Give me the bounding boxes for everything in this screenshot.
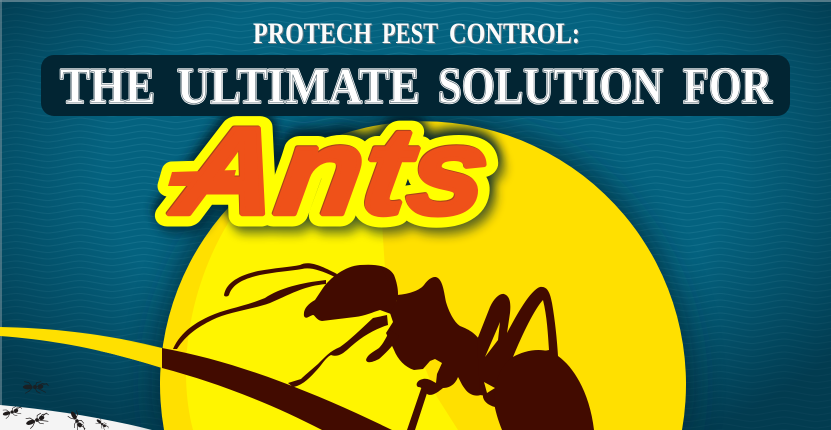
ant antennae bbox=[173, 263, 337, 349]
ant head bbox=[304, 265, 398, 321]
main heading: The Ultimate Solution For: ULTIMATE bbox=[177, 59, 420, 115]
top heading: Protech Pest Control: CONTROL: bbox=[449, 17, 580, 50]
yellow band overlap in the sun shadow bbox=[100, 337, 162, 368]
brown curved branch bbox=[162, 348, 392, 430]
top heading: Protech Pest Control: PEST bbox=[382, 17, 438, 50]
top heading: Protech Pest Control bbox=[253, 17, 581, 51]
main ants title word: Ants bbox=[170, 109, 503, 247]
main heading: The Ultimate Solution For bbox=[60, 59, 773, 115]
main heading: The Ultimate Solution For: SOLUTION bbox=[438, 59, 663, 115]
yellow gap beside the gaster bbox=[484, 382, 495, 393]
ant gaster bbox=[494, 350, 594, 430]
top heading: Protech Pest Control: PROTECH bbox=[254, 18, 373, 51]
heading bar bbox=[41, 55, 790, 116]
bright inner yellow of the sun bbox=[186, 220, 458, 430]
yellow outline of ants word: Ants bbox=[165, 103, 498, 241]
main heading: The Ultimate Solution For: THE bbox=[60, 59, 155, 115]
engraved inline on main heading: ULTIMATE bbox=[177, 59, 420, 115]
ant front legs bbox=[288, 315, 428, 430]
ant silhouette bbox=[173, 263, 594, 430]
ant back legs bbox=[477, 287, 558, 400]
yellow gaps between the back legs bbox=[485, 300, 549, 357]
orange fill of ants word: Ants bbox=[165, 103, 498, 241]
sun shadow bbox=[157, 118, 689, 430]
ant thorax and abdomen segments bbox=[381, 267, 510, 407]
engraved inline on main heading: FOR bbox=[683, 59, 773, 115]
engraved inline on main heading: THE bbox=[60, 59, 155, 115]
engraved inline on main heading bbox=[60, 59, 773, 115]
top heading: Protech Pest Control: PEST bbox=[383, 18, 439, 51]
orange fill of ants word: Ants bbox=[164, 102, 497, 240]
top heading: Protech Pest Control: CONTROL: bbox=[450, 18, 581, 51]
main heading: The Ultimate Solution For: FOR bbox=[683, 59, 773, 115]
sun disc bbox=[150, 110, 700, 430]
top heading: Protech Pest Control: PROTECH bbox=[253, 17, 372, 50]
main ants title word: Ants bbox=[165, 97, 497, 235]
yellow band: left of the sun bbox=[0, 327, 162, 368]
engraved inline on main heading: SOLUTION bbox=[438, 59, 663, 115]
white ground arc with small ants bbox=[0, 382, 152, 430]
